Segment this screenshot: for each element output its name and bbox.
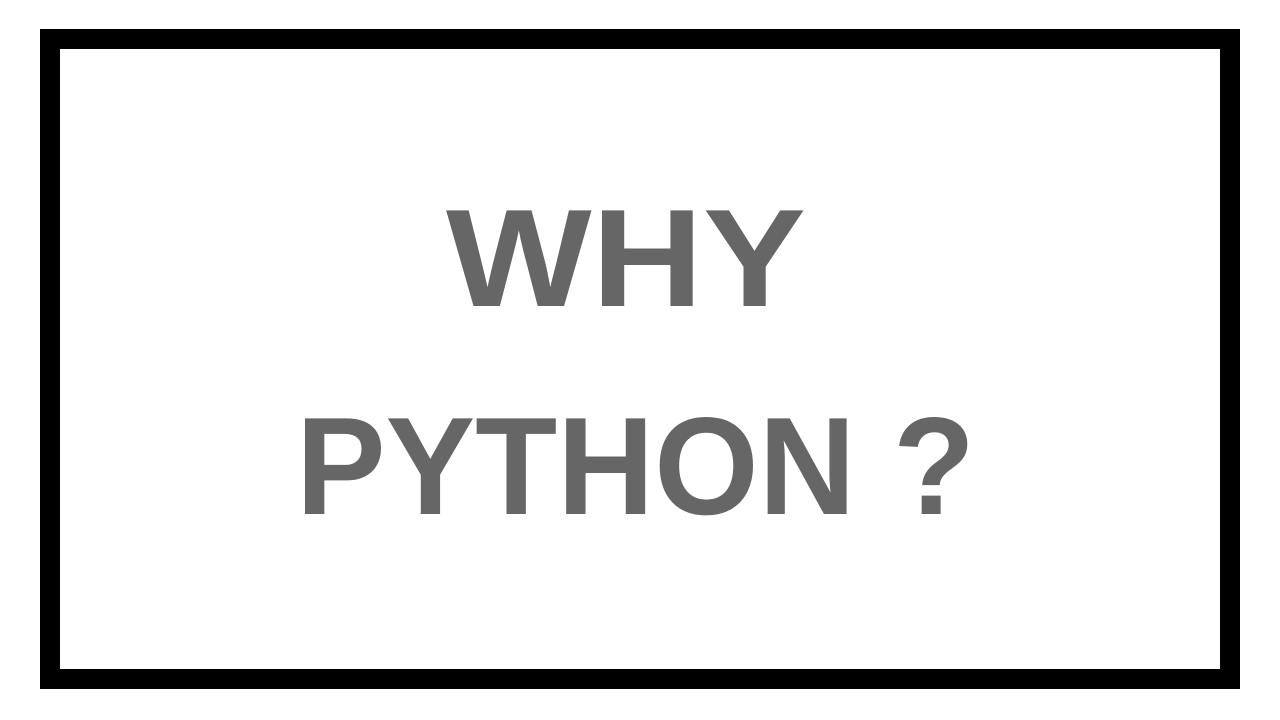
title line 1: WHY [446,181,806,336]
title: WHY PYTHON ? [296,181,975,544]
title line 2: PYTHON ? [296,389,975,544]
